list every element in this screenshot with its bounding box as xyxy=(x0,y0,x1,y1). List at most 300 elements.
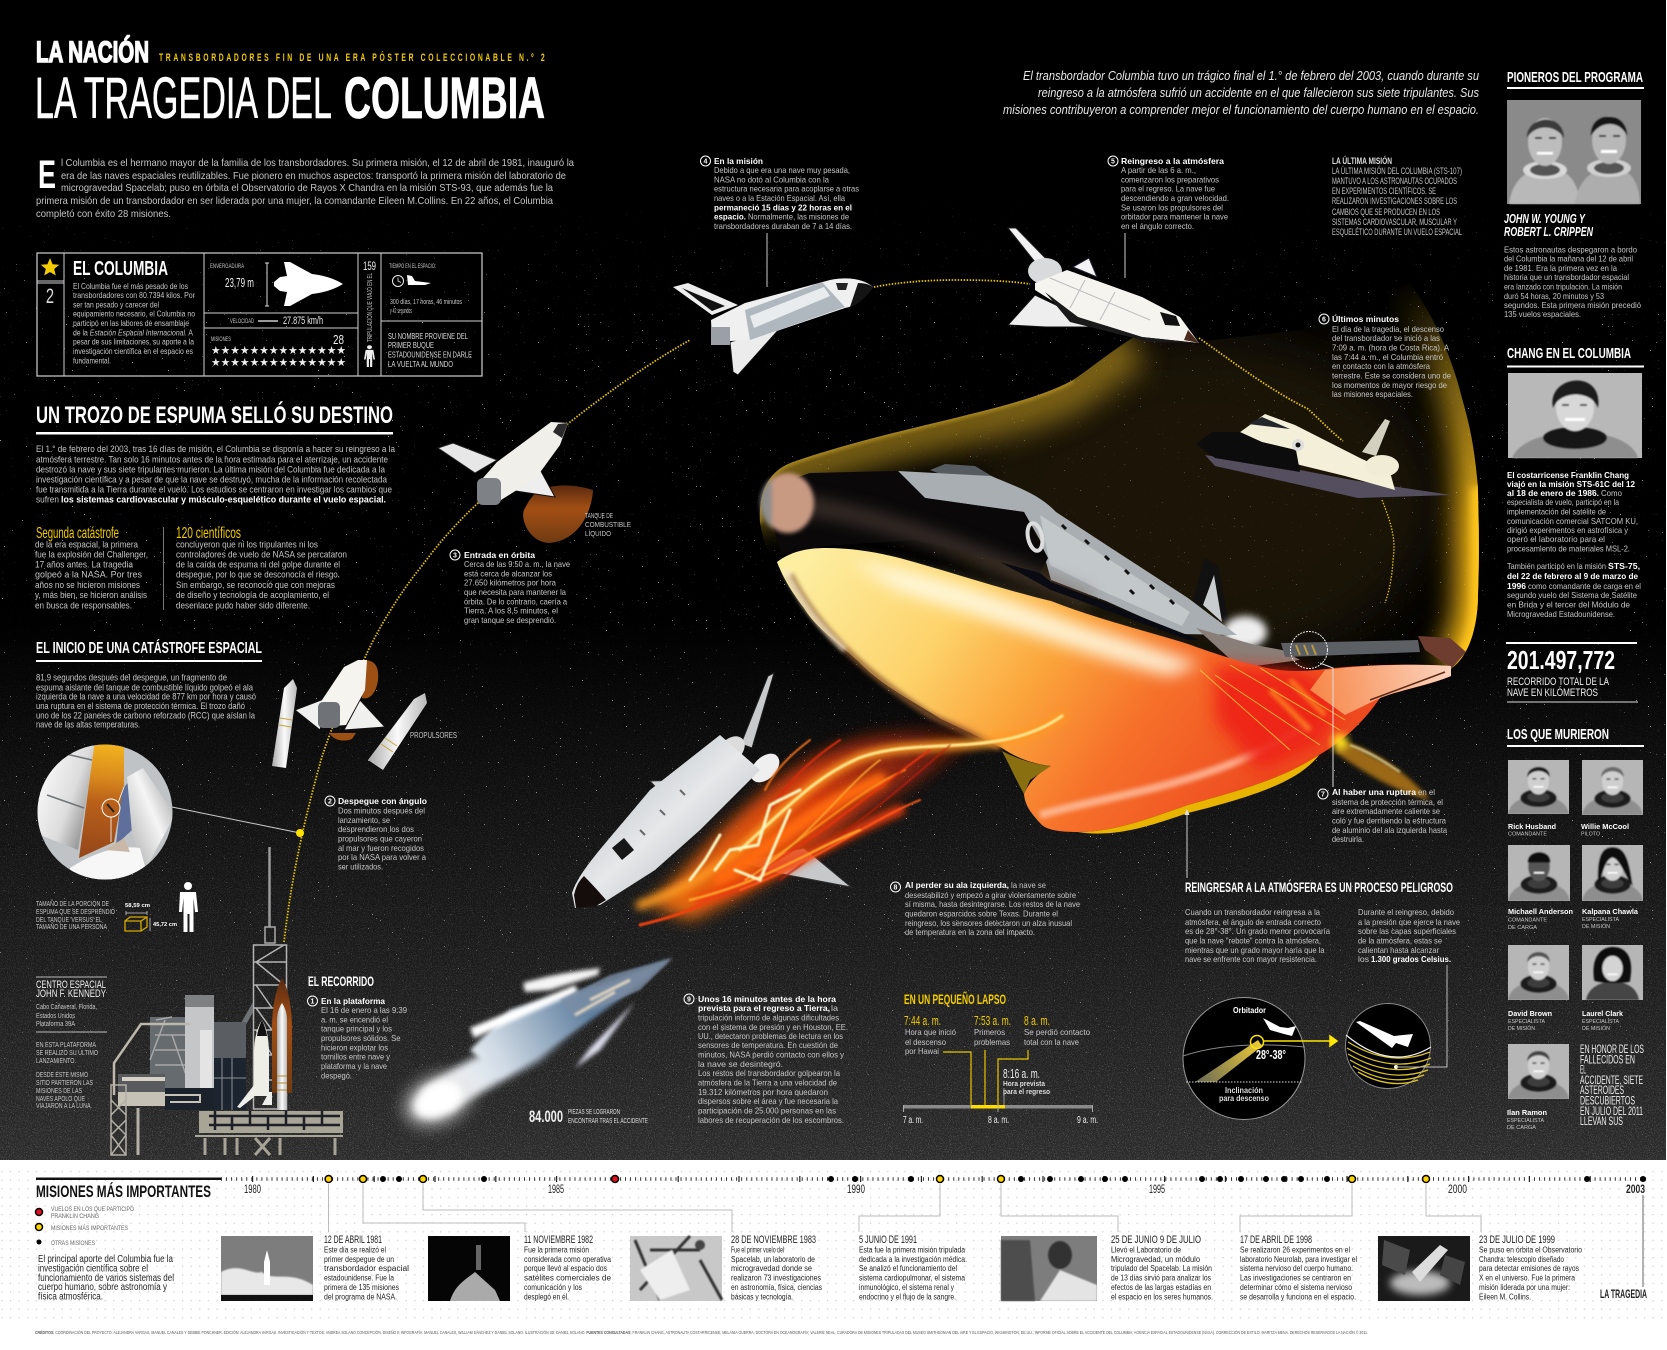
panel: pioneros: del Columbia la mañana del 12 de abril xyxy=(1504,254,1633,264)
text: segunda catástrofe: en busca de responsables. xyxy=(35,600,132,611)
mission 4: 5 JUNIO DE 1991 xyxy=(859,1234,917,1246)
step 6: Últimos minutos xyxy=(1332,313,1399,324)
step 3: 3 xyxy=(453,552,457,560)
text: la última misión: CAMBIOS QUE SE PRODUCEN EN LOS xyxy=(1332,207,1440,217)
portrait: Ilan Ramon: ESPECIALISTA xyxy=(1507,1118,1544,1124)
text: inicio paragraph: uno de los 22 paneles de carbono reforzado (RCC) que aíslan la xyxy=(36,710,255,720)
launch pad illustration xyxy=(111,847,343,1155)
launch site text xyxy=(36,977,107,1110)
mission 7: misión liderada por una mujer: xyxy=(1479,1283,1570,1292)
intro text with drop cap xyxy=(36,153,574,220)
step 3: que necesita para mantener la xyxy=(464,587,566,597)
canopy xyxy=(930,464,995,478)
step 5 xyxy=(1108,156,1229,231)
panel: en un pequeño lapso timeline: para el regreso xyxy=(1003,1089,1050,1096)
portrait: Michael Anderson: Michaell Anderson xyxy=(1508,907,1573,916)
text: inicio paragraph: una ruptura en el sistema de protección térmica. El trozo dañó xyxy=(36,701,245,711)
wingspan: 23,79 m xyxy=(225,275,254,290)
panel: chang en el columbia: Microgravedad Estadounidense. xyxy=(1507,609,1615,619)
step 3: gran tanque se desprendió. xyxy=(464,615,556,625)
step 9: UU., detectaron problemas de lectura en los xyxy=(698,1031,843,1041)
text: inicio paragraph: espuma aislante del tanque de combustible líquido golpeó el ala xyxy=(36,682,253,692)
step 9: la nave se desintegró. xyxy=(698,1059,783,1069)
mission 1: Este día se realizó el xyxy=(324,1246,386,1254)
step 4: 4 xyxy=(704,158,708,166)
step 4: espacio. xyxy=(714,212,746,222)
panel: chang en el columbia: procesamiento de materiales MSL-2. xyxy=(1507,544,1630,554)
step 8: la nave se xyxy=(1011,880,1046,890)
step 4: permaneció 15 días y 22 horas en el xyxy=(714,202,852,212)
time in space xyxy=(389,264,462,315)
italic deck: misiones contribuyeron a comprender mejor el funcionamiento del cuerpo humano en el espacio. xyxy=(1003,102,1479,117)
mission 7 xyxy=(1378,1234,1582,1302)
summary paragraph: funcionamiento de varios sistemas del xyxy=(38,1273,174,1284)
step 8: 8 xyxy=(894,884,898,892)
mission 3: básicas y tecnología. xyxy=(731,1292,793,1302)
speed: VELOCIDAD xyxy=(230,319,254,325)
exhaust streak xyxy=(1335,740,1430,800)
year labels: 2000 xyxy=(1448,1182,1467,1196)
text: la última misión: LA ÚLTIMA MISIÓN DEL COLUMBIA (STS-107) xyxy=(1332,166,1462,176)
photo: Franklin Chang xyxy=(1508,373,1642,458)
text: la última misión: LA ÚLTIMA MISIÓN xyxy=(1332,155,1392,166)
portrait: Rick Husband: COMANDANTE xyxy=(1508,832,1547,838)
mission 7: para detectar emisiones de rayos xyxy=(1479,1264,1579,1273)
panel: reingresar text: REINGRESAR A LA ATMÓSFERA ES UN PROCESO PELIGROSO xyxy=(1185,878,1453,895)
step 5: A partir de las 6 a. m., xyxy=(1121,165,1196,175)
wingspan: ENVERGADURA xyxy=(210,264,244,270)
label: tanque: TANQUE DE xyxy=(585,513,613,520)
portrait: Laurel Clark: Laurel Clark xyxy=(1582,1009,1624,1018)
connector lines xyxy=(328,1184,1481,1232)
time in space: 300 días, 17 horas, 46 minutos xyxy=(390,299,462,306)
panel: en un pequeño lapso timeline: 7:44 a. m. xyxy=(904,1013,941,1028)
box text: El Columbia fue el más pesado de los xyxy=(73,282,188,291)
panel: chang en el columbia: 1996 xyxy=(1507,581,1526,591)
text: la última misión: SISTEMAS CARDIOVASCULAR, MUSCULAR Y xyxy=(1332,217,1457,227)
burning shuttle with flames xyxy=(572,673,1062,925)
text: foam paragraph: los sistemas cardiovascular y músculo-esquelético durante el vuelo espacial. xyxy=(61,495,386,506)
panel: pioneros: era lanzado con tripulación. La misión xyxy=(1504,282,1622,292)
step 3: órbita. De lo contrario, caería a xyxy=(464,596,567,606)
step 1: a. m. se encendió el xyxy=(321,1014,388,1024)
mission 6: laboratorio Neurolab, para investigar el xyxy=(1240,1255,1357,1264)
stat: 84.000 pieces xyxy=(529,1107,648,1126)
step 7: de aluminio del ala izquierda hasta xyxy=(1332,825,1447,835)
panel: reingresar text: que la nave "rebote" contra la atmósfera, xyxy=(1185,936,1321,946)
step 1: El 16 de enero a las 9:39 xyxy=(321,1005,407,1015)
step 7: aire extremadamente caliente se xyxy=(1332,806,1440,816)
text: 120 científicos: controladores de vuelo de NASA se percataron xyxy=(176,549,347,560)
step 9: atmósfera de la Tierra a una velocidad de xyxy=(698,1078,837,1088)
text: 120 científicos: desenlace pudo haber sido diferente. xyxy=(176,600,310,611)
summary paragraph: física atmosférica. xyxy=(38,1292,103,1302)
panel: pioneros: historia que un transbordador espacial xyxy=(1504,272,1629,282)
arrow: step 5 xyxy=(1124,233,1126,278)
mission 7: X en el universo. Fue la primera xyxy=(1479,1274,1575,1282)
right booster xyxy=(368,693,427,770)
italic deck: reingreso a la atmósfera sufrió un accidente en el que fallecieron sus siete tripulantes. Sus xyxy=(1038,85,1479,100)
text: foam paragraph: atmósfera terrestre. Tan solo 16 minutos antes de la hora estimada para el aterrizaje, un accidente xyxy=(36,454,388,465)
orbiter on pad xyxy=(254,1020,269,1096)
poster number: 2 xyxy=(46,284,54,308)
step 4: Debido a que era una nave muy pesada, xyxy=(714,165,850,175)
credits: CRÉDITOS: COORDINACIÓN DEL PROYECTO: ALEJANDRA VARGAS, MANUEL CANALES Y DEBBIE PONCHNER. EDICIÓN: ALEJANDRA VARGAS. INVESTIGACIÓN Y TEXTOS: ANDREA SOLANO CONCEPCIÓN. DISEÑO E INFOGRAFÍA: MANUEL CANALES, WILLIAM SÁNCHEZ Y DANIEL SOLANO. ILUSTRACIÓN 3D: DANIEL SOLANO. FUENTES CONSULTADAS: FRANKLIN CHANG, ASTRONAUTA COSTARRICENSE; MELANIA GUERRA, DOCTORA EN OCEANOGRAFÍA; VALERIE NEAL, CURADORA DE MISIONES TRIPULADAS DEL MUSEO SMITHSONIAN DEL AIRE Y EL ESPACIO, WASHINGTON, EE.UU.; INFORME OFICIAL SOBRE EL ACCIDENTE DEL COLUMBIA; AGENCIA ESPACIAL ESTADOUNIDENSE (NASA). CORRECCIÓN DE ESTILO: MARITZA MENA. DERECHOS RESERVADOS LA NACIÓN © 2011. xyxy=(35,1328,1368,1335)
portrait: Kalpana Chawla xyxy=(1582,845,1643,930)
text: 120 científicos: Sin embargo, se reconoció que con mejoras xyxy=(176,580,335,591)
portrait: Rick Husband xyxy=(1508,760,1569,838)
box text: ser tan pesado y carecer del xyxy=(73,300,159,310)
left wing xyxy=(650,780,691,800)
fuselage xyxy=(572,735,760,908)
step 1: 1 xyxy=(311,998,315,1006)
right wing xyxy=(739,848,851,887)
panel: chang en el columbia: viajó en la misión STS-61C del 12 xyxy=(1507,479,1635,489)
portrait: Kalpana Chawla: Kalpana Chawla xyxy=(1582,907,1639,916)
mission 2 xyxy=(428,1234,612,1302)
text: segunda catástrofe: Segunda catástrofe xyxy=(36,525,119,542)
panel: reingresar text: a la presión que ejerce la nave xyxy=(1358,917,1460,927)
launch site text: DESDE ESTE MISMO xyxy=(36,1072,88,1079)
disintegrating debris over earth xyxy=(395,958,673,1137)
step 7: 7 xyxy=(1321,792,1325,798)
portrait: David Brown xyxy=(1508,945,1569,1032)
portrait: Laurel Clark: ESPECIALISTA xyxy=(1582,1019,1619,1025)
step 9: la xyxy=(831,1003,838,1013)
step 1: En la plataforma xyxy=(321,996,385,1006)
intro text with drop cap: completó con éxito 28 misiones. xyxy=(36,208,171,220)
launch site text: Plataforma 39A xyxy=(36,1021,75,1028)
panel: los que murieron: LOS QUE MURIERON xyxy=(1507,726,1609,743)
year labels: 2003 xyxy=(1626,1182,1645,1196)
panel: los que murieron xyxy=(1507,726,1644,1131)
year labels: 1995 xyxy=(1149,1182,1165,1196)
mission 3: realizaron 73 investigaciones xyxy=(731,1274,821,1282)
stat: 84.000 pieces: PIEZAS SE LOGRARON xyxy=(568,1109,620,1116)
year labels: 1990 xyxy=(847,1182,865,1196)
portrait: Ilan Ramon: DE CARGA xyxy=(1507,1125,1536,1131)
text: 120 científicos: concluyeron que ni los tripulantes ni los xyxy=(176,539,318,550)
step 4: Normalmente, las misiones de xyxy=(748,212,849,222)
box text: fundamental. xyxy=(73,356,111,365)
box text xyxy=(73,282,195,365)
step 2: ser utilizados. xyxy=(338,862,383,872)
step 4 xyxy=(700,156,859,231)
step 1: plataforma y la nave xyxy=(321,1061,387,1071)
mission 2: porque llevó al espacio dos xyxy=(524,1264,607,1273)
missions stars: ★★★★★★★★★★★★★★ xyxy=(211,356,346,369)
panel: chang en el columbia: segundo vuelo del Sistema de Satélite xyxy=(1507,590,1637,600)
step 5: comenzaron los preparativos xyxy=(1121,174,1219,184)
step 5: 5 xyxy=(1111,158,1115,166)
box heading: EL COLUMBIA xyxy=(73,258,168,280)
name origin: PRIMER BUQUE xyxy=(388,340,434,350)
panel: chang en el columbia: operó el laboratorio para el xyxy=(1507,534,1605,544)
launch site text: SE REALIZÓ SU ÚLTIMO xyxy=(36,1048,98,1057)
intro text with drop cap: E xyxy=(38,153,56,197)
legend: FRANKLIN CHANG xyxy=(51,1213,99,1220)
tribute text: ASTEROIDES xyxy=(1580,1083,1624,1097)
italic deck xyxy=(1003,68,1479,117)
mission 1: primer despegue de un xyxy=(324,1255,394,1264)
intro text with drop cap: era de las naves espaciales reutilizables. Fue pionero en muchos aspectos: transportó la primera misión del laboratorio de xyxy=(61,170,566,182)
panel: en un pequeño lapso timeline: el descenso xyxy=(905,1037,946,1047)
portrait: Willie McCool: Willie McCool xyxy=(1581,822,1629,831)
panel: reingresar text: los xyxy=(1358,954,1369,964)
mission 5: el espacio en los seres humanos. xyxy=(1111,1292,1213,1302)
panel: pioneros: duró 54 horas, 20 minutos y 53 xyxy=(1504,291,1604,301)
panel: en un pequeño lapso timeline: 8:16 a. m. xyxy=(1003,1066,1040,1081)
portrait: David Brown: ESPECIALISTA xyxy=(1508,1019,1545,1025)
panel: chang en el columbia: al 18 de enero de 1986. xyxy=(1507,488,1599,498)
mission 6: Se realizaron 26 experimentos en el xyxy=(1240,1246,1350,1254)
step 9: sensores de temperatura. En cuestión de xyxy=(698,1040,838,1050)
step 2: lanzamiento, se xyxy=(338,815,390,825)
step 8: Al perder su ala izquierda, xyxy=(905,880,1009,890)
label: tanque xyxy=(585,513,631,538)
box text: investigación científica en el espacio es xyxy=(73,347,193,356)
foam size comparison: 45,72 cm xyxy=(153,922,177,928)
step 5: orbitador para mantener la nave xyxy=(1121,212,1228,222)
solid booster xyxy=(277,1003,287,1110)
mission 4 xyxy=(859,1234,967,1302)
panel: en un pequeño lapso timeline: Primeros xyxy=(974,1027,1005,1037)
step 9: prevista para el regreso a Tierra, xyxy=(698,1003,830,1013)
stat: 84.000 pieces: 84.000 xyxy=(529,1107,563,1126)
panel: pioneros: 135 vuelos espaciales. xyxy=(1504,309,1581,319)
summary paragraph: El principal aporte del Columbia fue la xyxy=(38,1254,173,1265)
icon: trajectory point xyxy=(296,829,304,837)
text: inicio paragraph: izquierda de la nave a una velocidad de 877 km por hora y causó xyxy=(36,692,256,702)
text: foam paragraph: investigación científica y a pesar de que la nave se destruyó, mucha de la información recolectada xyxy=(36,474,388,485)
text: 120 científicos xyxy=(164,525,347,611)
mission 7: Eileen M. Collins. xyxy=(1479,1292,1531,1302)
panel: reingresar text xyxy=(1184,809,1460,964)
panel: en un pequeño lapso timeline: 9 a. m. xyxy=(1077,1115,1098,1126)
panel: reingresar text: de la atmósfera, estas se xyxy=(1358,936,1442,946)
mission 6: se desarrolla y funciona en el espacio. xyxy=(1240,1292,1356,1302)
step 4: naves o a la Estación Espacial. Así, ella xyxy=(714,193,845,203)
time in space: y 42 segundos xyxy=(390,308,412,315)
step 3: está cerca de alcanzar los xyxy=(464,568,552,578)
mission 1: del programa de NASA. xyxy=(324,1292,397,1302)
crew: 159 xyxy=(363,259,376,273)
panel: chang en el columbia: Como xyxy=(1601,488,1622,498)
step 2: Dos minutos después del xyxy=(338,806,425,816)
intro text with drop cap: microgravedad Spacelab; puso en órbita el Observatorio de Rayos X Chandra en la misión STS-93, que además fue la xyxy=(61,182,553,194)
timeline axis xyxy=(36,1176,1647,1182)
tribute text: LLEVAN SUS xyxy=(1580,1114,1623,1128)
launch site text: LANZAMIENTO. xyxy=(36,1058,76,1065)
step 8 xyxy=(890,880,1080,937)
text: foam paragraph: destrozó la nave y sus siete tripulantes murieron. La última misión del Columbia fue dedicada a la xyxy=(36,464,386,475)
launch site text: Cabo Cañaveral, Florida, xyxy=(36,1004,97,1011)
foam size comparison: ESPUMA QUE SE DESPRENDIÓ xyxy=(36,907,115,916)
mission 1: transbordador espacial xyxy=(324,1264,409,1273)
step 4: NASA no dotó al Columbia con la xyxy=(714,174,829,184)
external tank on pad xyxy=(272,978,292,1093)
step 6: las misiones espaciales. xyxy=(1332,389,1413,399)
mission 4: dedicada a la investigación médica. xyxy=(859,1255,967,1264)
intro text with drop cap: l Columbia es el hermano mayor de la familia de los transbordadores. Su primera misión, el 12 de abril de 1981, inauguró la xyxy=(61,157,574,169)
step 6 xyxy=(1319,313,1451,399)
mission 2: desplegó en él. xyxy=(524,1292,569,1302)
shuttle 3: tank separation xyxy=(438,422,593,543)
heading: MISIONES MÁS IMPORTANTES xyxy=(36,1182,211,1201)
wingspan xyxy=(210,262,343,306)
step 1: tanque principal y los xyxy=(321,1024,392,1034)
panel: chang en el columbia: del 22 de febrero al 9 de marzo de xyxy=(1507,571,1638,581)
mission 5 xyxy=(1001,1234,1213,1302)
year labels: 1985 xyxy=(548,1182,564,1196)
wing underside xyxy=(1310,665,1451,715)
text: foam paragraph xyxy=(36,444,396,506)
step 6: del transbordador se inició a las xyxy=(1332,333,1440,343)
panel: reingresar text: sobre las capas superficiales xyxy=(1358,926,1456,936)
text: segunda catástrofe xyxy=(35,525,148,611)
foam size comparison: DEL TANQUE 'VERSUS' EL xyxy=(36,917,102,924)
text: la última misión: MANTUVO A LOS ASTRONAUTAS OCUPADOS xyxy=(1332,176,1457,186)
text: inicio paragraph xyxy=(36,673,256,730)
left access arm xyxy=(114,1024,190,1095)
flames back layer xyxy=(650,732,975,920)
text: foam paragraph: fue transmitida a la Tierra durante el vuelo. Los estudios se centraron en investigar los cambios que xyxy=(36,485,392,496)
red hot zone xyxy=(1215,665,1345,770)
text: la última misión: REALIZARON INVESTIGACIONES SOBRE LOS xyxy=(1332,196,1457,206)
panel: El Columbia fact box xyxy=(37,253,482,376)
launch site text: Estados Unidos xyxy=(36,1013,75,1020)
panel: en un pequeño lapso timeline: Se perdió contacto xyxy=(1024,1027,1090,1037)
portrait: Michael Anderson: COMANDANTE xyxy=(1508,918,1547,924)
shuttle 4: in orbit with open bay xyxy=(673,278,873,375)
panel: chang en el columbia: implementación del satélite de xyxy=(1507,506,1606,516)
step 8: quedaron esparcidos sobre Texas. Durante el xyxy=(905,908,1058,918)
text: inicio paragraph: 81,9 segundos después del despegue, un fragmento de xyxy=(36,673,227,683)
mission 6: sistema nervioso del cuerpo humano. xyxy=(1240,1264,1353,1273)
panel: en un pequeño lapso timeline: Hora que inició xyxy=(905,1027,956,1037)
mission 2: satélites comerciales de xyxy=(524,1274,612,1282)
diagram: entry angle: Orbitador xyxy=(1233,1006,1266,1015)
wing strip xyxy=(1196,628,1300,668)
trajectory: dotted flight path xyxy=(284,280,1394,942)
year labels xyxy=(244,1182,1645,1196)
external tank xyxy=(523,485,593,543)
text: la última misión: ESQUELÉTICO DURANTE UN VUELO ESPACIAL xyxy=(1332,227,1462,237)
arrow: step 4 xyxy=(766,233,768,287)
crew xyxy=(363,259,376,367)
step 1: despegó. xyxy=(321,1070,352,1080)
legend: MISIONES MÁS IMPORTANTES xyxy=(51,1223,129,1232)
launch site text: VIAJARON A LA LUNA. xyxy=(36,1103,92,1110)
text: 120 científicos: despegue, por lo que se desconocía el riesgo. xyxy=(176,570,340,581)
step 9: labores de recuperación de los escombros. xyxy=(698,1115,844,1125)
text: la última misión: EN EXPERIMENTOS CIENTÍFICOS. SE xyxy=(1332,186,1436,196)
mission 4: inmunológico, el sistema renal y xyxy=(859,1283,954,1292)
mission 4: Se analizó el funcionamiento del xyxy=(859,1264,957,1273)
speed xyxy=(230,315,323,327)
stat: total distance xyxy=(1506,642,1638,702)
portrait: Rick Husband: Rick Husband xyxy=(1508,822,1556,831)
title: LA TRAGEDIA DEL xyxy=(35,66,332,131)
box text: pesar de sus limitaciones, su aporte a la xyxy=(73,338,194,347)
belly highlights xyxy=(850,560,1200,676)
panel: en un pequeño lapso timeline: por Hawai xyxy=(905,1046,939,1056)
mission 6: Las investigaciones se centraron en xyxy=(1240,1274,1351,1282)
missions stars: ★★★★★★★★★★★★★★ xyxy=(211,344,346,357)
launch site text: NAVES APOLO QUE xyxy=(36,1096,85,1103)
name origin: SU NOMBRE PROVIENE DEL xyxy=(388,331,468,341)
orange belly xyxy=(777,548,1451,832)
tail fin xyxy=(1193,558,1229,623)
mission 7: Chandra: telescopio diseñado xyxy=(1479,1255,1564,1264)
step 5: Se usaron los propulsores del xyxy=(1121,202,1223,212)
side gantry xyxy=(237,1002,253,1068)
step 9 xyxy=(684,994,848,1125)
step 9: minutos, NASA perdió contacto con ellos y xyxy=(698,1050,845,1060)
panel: en un pequeño lapso timeline: total con la nave xyxy=(1024,1037,1079,1047)
foam size comparison: 58,59 cm xyxy=(125,903,150,909)
belly rim xyxy=(1078,755,1319,834)
step 7: Al haber una ruptura xyxy=(1332,787,1416,797)
missions stars: MISIONES xyxy=(211,337,231,343)
legend: OTRAS MISIONES xyxy=(51,1240,96,1247)
missions stars: 28 xyxy=(333,332,344,347)
stat: total distance: RECORRIDO TOTAL DE LA xyxy=(1507,676,1609,688)
mission 3: Fue el primer vuelo del xyxy=(731,1246,784,1254)
step 1 xyxy=(308,973,407,1080)
mission 4: Esta fue la primera misión tripulada xyxy=(859,1246,965,1254)
header masthead: LA NACIÓN xyxy=(36,35,149,69)
mission 1: estadounidense. Fue la xyxy=(324,1274,394,1282)
portrait: Michael Anderson: DE CARGA xyxy=(1508,925,1537,931)
text: 120 científicos: 120 científicos xyxy=(176,525,241,542)
diagram: atmosphere layers xyxy=(1346,965,1447,1088)
mission 2: Fue la primera misión xyxy=(524,1246,589,1254)
panel: chang en el columbia: como comandante de carga en el xyxy=(1528,581,1641,591)
step 2: al mar y fueron recogidos xyxy=(338,843,424,853)
tribute text: EL xyxy=(1580,1062,1586,1076)
step 6: El día de la tragedia, el descenso xyxy=(1332,324,1444,334)
panel: chang en el columbia: También participó en la misión xyxy=(1507,561,1606,571)
panel: chang en el columbia: especialista de vuelo, participó en la xyxy=(1507,497,1619,507)
box text: participó en las labores de ensamblaje xyxy=(73,319,189,328)
diagram: entry angle: 28°-38° xyxy=(1256,1047,1286,1062)
mission 2: 11 NOVIEMBRE 1982 xyxy=(524,1234,593,1246)
step 2: por la NASA para volver a xyxy=(338,852,426,862)
step 9: participación de 25.000 personas en las xyxy=(698,1106,836,1116)
portrait: David Brown: David Brown xyxy=(1508,1009,1552,1018)
step 6: terrestre. Este se considera uno de xyxy=(1332,370,1451,380)
panel: chang en el columbia: STS-75, xyxy=(1608,561,1640,571)
mission 5: efectos de las largas estadías en xyxy=(1111,1283,1211,1292)
mission 4: endocrino y el flujo de la sangre. xyxy=(859,1292,956,1302)
text: foam paragraph: sufren xyxy=(36,495,59,506)
panel: en un pequeño lapso timeline: Hora prevista xyxy=(1003,1081,1045,1088)
step 9: tripulación informó de algunas dificultades xyxy=(698,1012,839,1022)
stat: total distance: NAVE EN KILÓMETROS xyxy=(1507,686,1598,699)
foam size comparison: TAMAÑO DE LA PORCIÓN DE xyxy=(36,899,109,908)
back building xyxy=(150,1017,186,1089)
big shuttle re-entering xyxy=(760,464,1466,834)
step 6: los momentos de mayor riesgo de xyxy=(1332,380,1447,390)
foam size comparison xyxy=(36,882,198,932)
label: tanque: LÍQUIDO xyxy=(585,529,611,538)
mission 1: 12 DE ABRIL 1981 xyxy=(324,1234,382,1246)
step 5: en el ángulo correcto. xyxy=(1121,221,1194,231)
launch site text: CENTRO ESPACIAL xyxy=(36,979,106,991)
mission 3: Spacelab, un laboratorio de xyxy=(731,1255,815,1264)
panel: pioneros: ROBERT L. CRIPPEN xyxy=(1504,224,1593,239)
